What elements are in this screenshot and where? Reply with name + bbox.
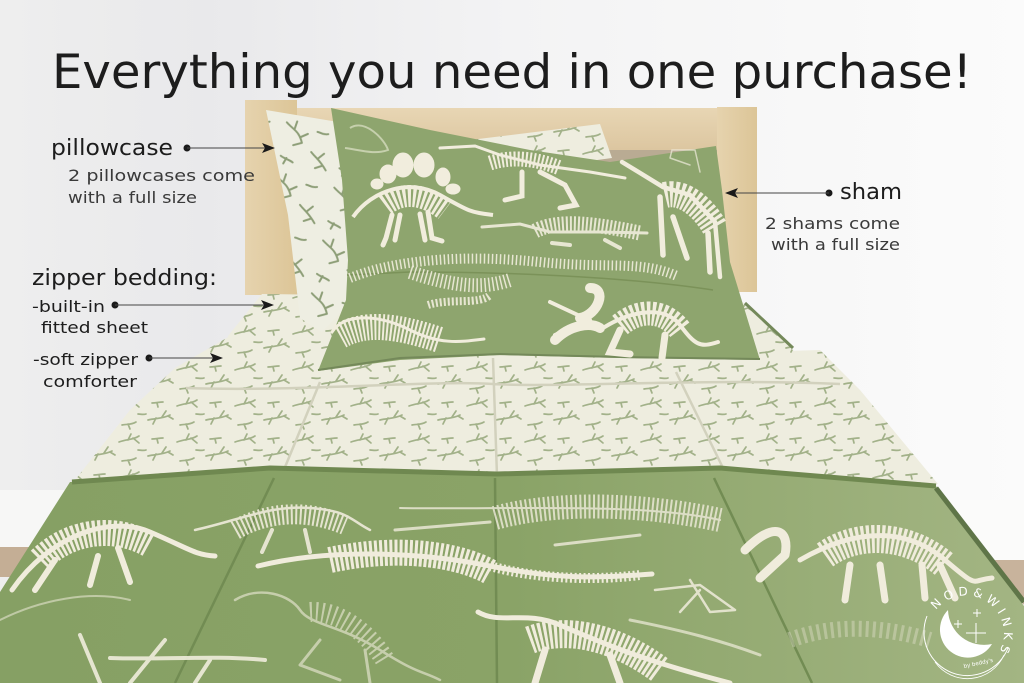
sham dino: sauropod right <box>622 150 720 277</box>
callout: zipper bedding: fitted sheet <box>41 318 148 337</box>
callout: zipper bedding: -soft zipper <box>33 350 138 369</box>
skeleton: t-rex outline <box>235 593 440 683</box>
callout: pillowcase <box>51 136 275 207</box>
headboard <box>245 100 757 295</box>
callout: sham: with a full size <box>771 235 900 254</box>
brand logo: by beddy's <box>963 658 994 670</box>
callout: zipper bedding: zipper bedding: <box>32 266 217 291</box>
callout: sham <box>725 180 902 254</box>
back pillowcase <box>266 110 352 332</box>
skeleton: bottom left <box>0 596 265 683</box>
sham dino: lower left spine <box>332 318 484 341</box>
callout: pillowcase: pillowcase <box>51 136 173 161</box>
callout: sham: sham <box>840 180 902 205</box>
skeleton: left sauropod <box>12 526 215 590</box>
title: Everything you need in one purchase! <box>52 45 972 100</box>
moon icon <box>940 610 992 658</box>
dinosaur skeletons on comforter <box>0 506 992 683</box>
skeleton: faint right <box>790 629 930 640</box>
brand logo: NOD&WINKS <box>930 586 1013 654</box>
sham dino: faint skull <box>345 125 388 152</box>
sham dino: stegosaurus <box>353 153 493 245</box>
skeleton: top centre spine <box>395 506 720 545</box>
sheet hem on right <box>745 303 793 348</box>
callout: sham: 2 shams come <box>765 214 900 233</box>
sham dino: raptor <box>440 146 625 208</box>
callout: zipper bedding: comforter <box>43 372 137 391</box>
zipper comforter green outside <box>0 468 1024 683</box>
skeleton: long marine reptile <box>258 553 652 578</box>
arrow: sham <box>725 188 832 198</box>
sham dino: plesiosaur centre <box>482 224 647 248</box>
brand logo <box>923 586 1013 680</box>
callout: pillowcase: 2 pillowcases come <box>68 166 255 185</box>
callout: zipper bedding: -built-in <box>32 297 105 316</box>
baseboard and floor <box>0 490 1024 605</box>
back pillowcase top edge <box>470 124 612 165</box>
skeleton: stegosaurus <box>195 508 370 552</box>
sham dino: triceratops <box>550 288 718 358</box>
front sham pillow <box>318 108 760 371</box>
sham dino: long serpent <box>350 259 677 305</box>
arrow: fitted sheet <box>112 300 274 310</box>
skeleton: triceratops <box>745 531 992 600</box>
callout: zipper bedding <box>32 266 274 391</box>
skeleton: bottom centre <box>478 612 760 683</box>
arrow: comforter <box>146 353 223 363</box>
fitted sheet <box>225 294 800 400</box>
zipper comforter cream inner <box>72 330 938 484</box>
stars icon <box>954 609 986 643</box>
skeleton: small legs <box>655 580 735 612</box>
callout: pillowcase: with a full size <box>68 188 197 207</box>
arrow: pillowcase <box>184 143 275 153</box>
